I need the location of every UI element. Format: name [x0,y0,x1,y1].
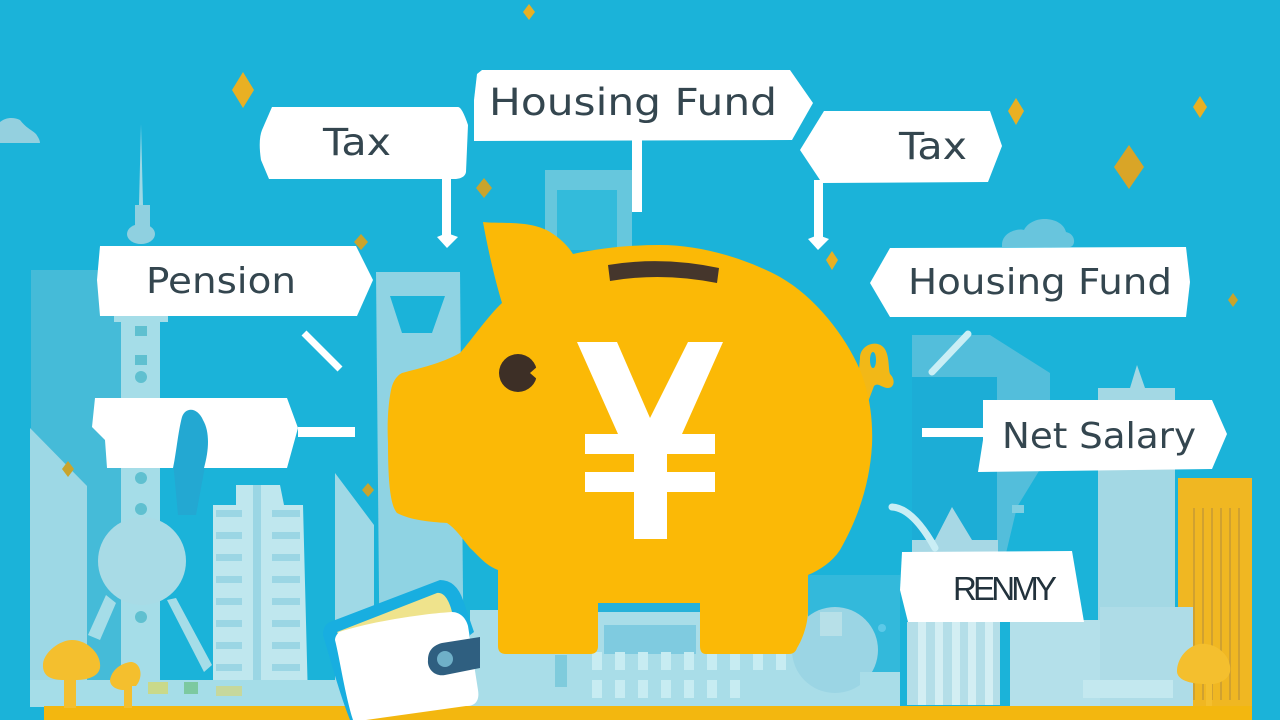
label: Tax (left) [260,107,468,179]
label: Housing Fund (right): Housing Fund [908,262,1172,303]
label: Pension: Pension [146,261,296,302]
centre background tower [545,170,632,250]
pig eye [499,354,538,392]
label: Net Salary: Net Salary [1002,416,1196,457]
connector lines [298,138,984,548]
label: RENMY: RENMY [953,570,1057,607]
piggy bank [388,222,894,654]
label: Tax (right): Tax [898,125,967,168]
pig body [388,222,872,654]
yen sign [577,342,723,539]
right lower blocks [860,607,1193,706]
label: Housing Fund (top): Housing Fund [489,81,777,124]
wallet [323,580,480,720]
label: Housing Fund (right) [870,247,1190,317]
label: Tax (right) [800,111,1002,183]
label: Housing Fund (top) [474,70,813,141]
label: Tax (left): Tax [322,121,391,164]
ground strip [44,706,1252,720]
label: Net Salary [978,400,1227,472]
wallet clasp [428,637,480,675]
orange building [1178,478,1252,708]
label: Pension [97,246,373,316]
label: RENMY [900,551,1084,622]
right skyline [912,219,1175,640]
label: blank banner (left) [92,398,298,468]
pig tail [858,344,894,402]
sparkles [62,4,1238,497]
trees [43,640,1230,708]
centre base city [470,575,900,706]
cloud: left [0,118,40,143]
coin slot [608,261,719,283]
left skyline [30,124,470,707]
